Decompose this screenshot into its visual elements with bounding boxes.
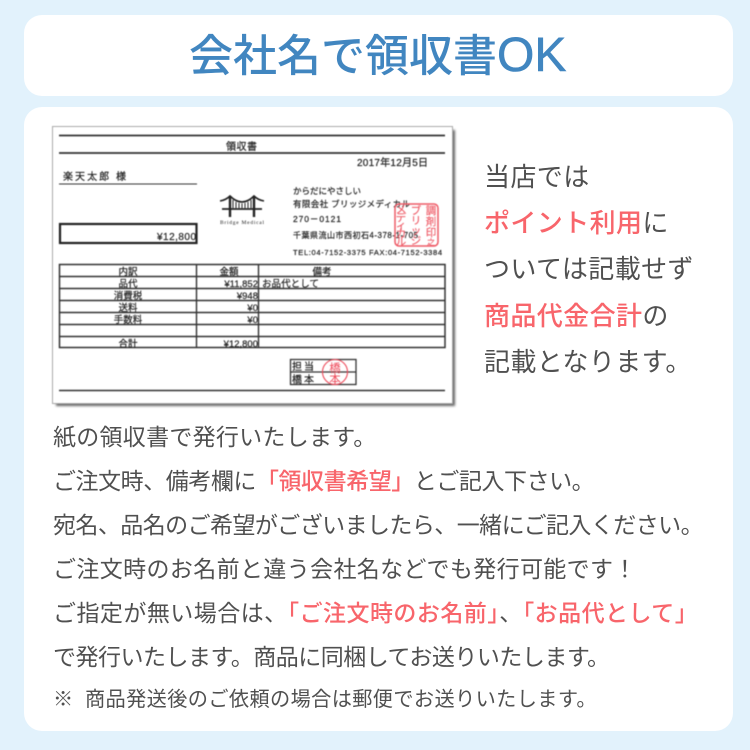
text block: issuing instructions: 商品発送後のご依頼の場合は郵便でお送りいたします。 (85, 689, 597, 711)
icon: personal seal: 橋 (329, 361, 341, 375)
text block: point usage note: 当店では (484, 162, 590, 192)
receipt image: 合計 (118, 338, 138, 350)
receipt image: お品代として (262, 279, 319, 290)
receipt image: 消費税 (114, 290, 143, 302)
receipt image: 有限会社 ブリッジメディカル (293, 199, 410, 209)
receipt image: 270－0121 (293, 214, 341, 224)
receipt image: 領収書 (226, 140, 257, 153)
text block: point usage note: ついては記載せず (484, 254, 694, 284)
icon: company seal (395, 204, 438, 248)
panel: title (24, 15, 733, 96)
receipt image: 楽天太郎 様 (63, 170, 126, 183)
icon: personal seal: 本 (329, 372, 341, 386)
text block: issuing instructions: ご注文時のお名前と違う会社名などでも発行可能です！ (53, 556, 637, 582)
icon: company seal: 調 (426, 205, 436, 217)
receipt image: 送料 (118, 302, 138, 314)
receipt image: 品代 (118, 279, 138, 290)
text block: issuing instructions: ご指定が無い場合は、「ご注文時のお名前」、「お品代として」 (53, 600, 698, 626)
text block: point usage note: ポイント利用に (484, 208, 669, 238)
receipt image: 担当 (292, 360, 314, 373)
receipt image: 手数料 (114, 314, 143, 326)
text block: point usage note: 記載となります。 (484, 347, 692, 377)
icon: personal seal (322, 360, 348, 386)
icon: company seal: ル (396, 236, 406, 248)
text block: issuing instructions: ※ (53, 689, 74, 711)
icon: company seal: カ (396, 228, 406, 240)
icon: company seal: 剤 (426, 216, 436, 228)
text block: point usage note (484, 162, 694, 377)
icon: company seal: ブ (411, 204, 422, 217)
panel: receipt information (24, 107, 733, 731)
receipt image: 橋本 (292, 373, 314, 386)
text block: issuing instructions: 紙の領収書で発行いたします。 (53, 424, 376, 450)
icon: company seal: ィ (396, 220, 406, 232)
receipt image: ¥0 (246, 315, 258, 326)
receipt image: 備考 (312, 266, 332, 278)
text block: issuing instructions: で発行いたします。商品に同梱してお送りいたします。 (53, 644, 610, 670)
icon: company seal: ジ (411, 235, 421, 247)
text block: point usage note: 商品代金合計の (484, 301, 669, 331)
heading: 会社名で領収書OK: 会社名で領収書OK (189, 29, 566, 82)
icon: company seal: 印 (426, 227, 436, 239)
icon: company seal: リ (411, 215, 421, 227)
receipt image: 2017年12月5日 (357, 156, 428, 169)
icon: bridge logo (220, 196, 264, 217)
receipt image: ¥12,800 (223, 339, 258, 350)
receipt image: ¥948 (236, 291, 258, 302)
receipt image: 内訳 (118, 266, 138, 278)
receipt image (52, 126, 457, 408)
receipt image: 金額 (219, 266, 239, 278)
receipt image: ¥12,800 (156, 232, 196, 243)
text block: issuing instructions (53, 424, 703, 711)
receipt image: TEL:04-7152-3375 FAX:04-7152-3384 (293, 248, 442, 257)
receipt image: ¥11,852 (223, 279, 258, 290)
text block: issuing instructions: ご注文時、備考欄に「領収書希望」とご記入下さい。 (53, 468, 594, 494)
receipt image: 千葉県流山市西初石4-378-1-705 (293, 230, 419, 240)
icon: company seal: デ (396, 211, 407, 224)
receipt image: からだにやさしい (293, 186, 361, 196)
icon: company seal: メ (396, 204, 406, 216)
icon: company seal: 之 (427, 237, 435, 247)
receipt image: ¥0 (246, 303, 258, 314)
text block: issuing instructions: 宛名、品名のご希望がございましたら、一緒にご記入ください。 (53, 512, 703, 538)
icon: company seal: ッ (411, 225, 421, 237)
receipt image: Bridge Medical (220, 220, 264, 226)
